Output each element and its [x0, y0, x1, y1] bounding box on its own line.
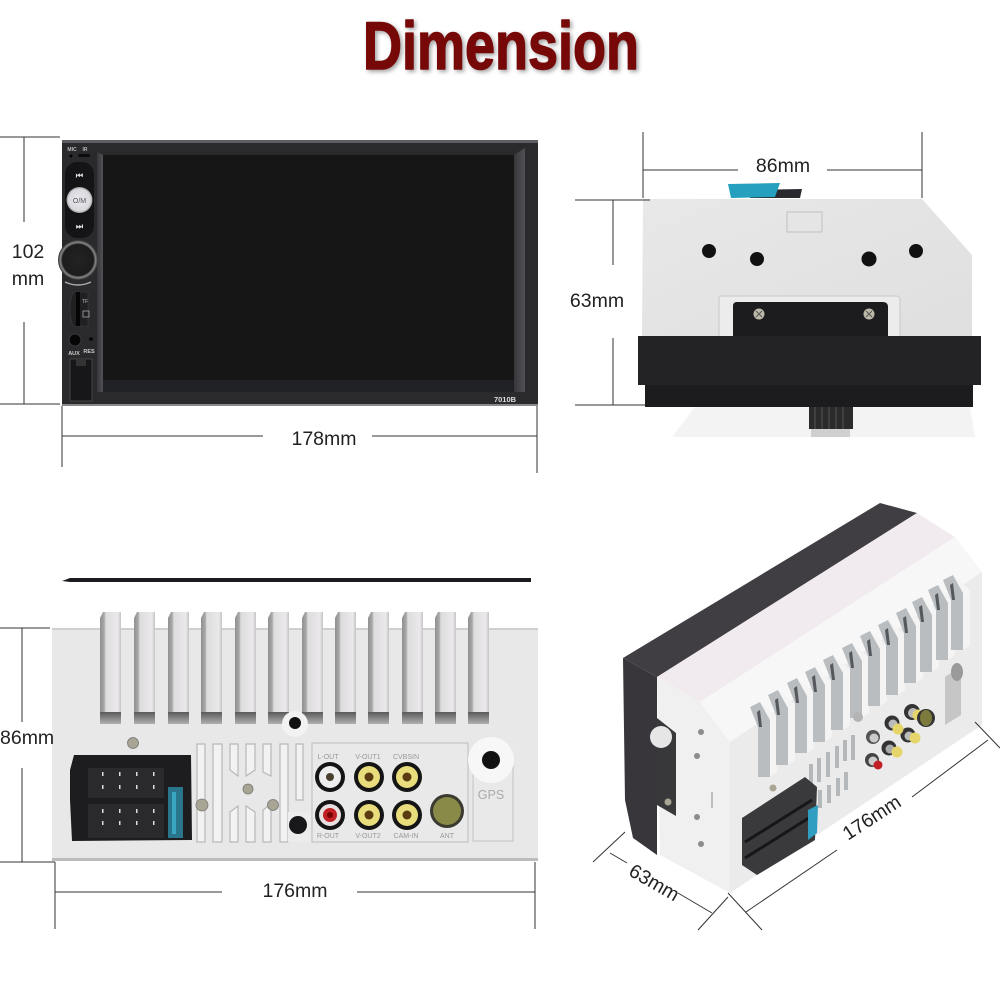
angled vent slots — [811, 735, 853, 808]
dimension: 63mm angled: 63mm — [625, 860, 683, 906]
CVBSIN jack — [392, 762, 422, 792]
top edge of faceplate — [62, 578, 531, 582]
side bracket — [650, 718, 676, 816]
control column: MIC — [67, 147, 77, 153]
mounting screw — [853, 712, 863, 722]
title: Dimension — [363, 8, 639, 84]
RCA jack block: CVBSIN — [393, 754, 419, 761]
dimension: 102mm height: mm — [12, 268, 44, 290]
power button — [66, 187, 92, 213]
control column: AUX — [68, 351, 80, 357]
knob — [809, 407, 853, 437]
dimension: 63mm height: 63mm — [570, 290, 624, 312]
dimension: 86mm rear depth: 86mm — [0, 727, 54, 749]
L-OUT jack — [315, 762, 345, 792]
RCA jack block: R-OUT — [317, 833, 340, 840]
dimension: 176mm angled — [728, 722, 1000, 930]
control column: O/M — [73, 198, 86, 205]
panel: rear view of head unit — [52, 578, 538, 861]
dimension: 86mm rear depth — [0, 628, 55, 862]
screen side strips — [97, 148, 525, 392]
ANT jack — [430, 794, 464, 828]
GPS socket — [468, 737, 514, 841]
angled fins — [750, 575, 970, 777]
USB cover — [70, 359, 92, 401]
GPS recess — [945, 663, 963, 725]
screen — [103, 155, 514, 380]
panel: angled rear view of head unit — [623, 503, 982, 893]
V-OUT1 jack — [354, 762, 384, 792]
dimension: 178mm width — [62, 406, 537, 473]
dimension: 102mm height: 102 — [12, 241, 44, 263]
dimension: 86mm depth: 86mm — [756, 155, 810, 177]
panel: front view of head unit — [58, 140, 538, 406]
wiring connector — [70, 755, 192, 841]
RCA jack block: V-OUT2 — [355, 833, 381, 840]
heat sink fins — [100, 612, 489, 724]
control column: TF — [82, 299, 88, 305]
side surface — [657, 677, 730, 893]
dimension: 102mm height — [0, 137, 60, 404]
rear surface — [730, 572, 982, 893]
angled connector — [742, 777, 818, 875]
metal top plate — [642, 199, 972, 337]
dimension: 63mm height — [570, 200, 650, 405]
volume knob — [58, 240, 98, 280]
mounting hole — [282, 711, 308, 737]
RCA jack block: L-OUT — [318, 754, 339, 761]
vent slots — [197, 744, 303, 842]
screws — [128, 738, 393, 811]
GPS socket: GPS — [478, 788, 504, 802]
control column: ⏭ — [76, 222, 84, 231]
dimension: 63mm angled — [593, 832, 728, 930]
side screw holes — [694, 729, 712, 847]
SD slot — [70, 292, 88, 326]
RCA jack block: ANT — [440, 833, 455, 840]
vent holes — [702, 244, 923, 266]
black front edge — [623, 503, 917, 677]
dimension: 176mm rear width — [55, 862, 535, 929]
angled RCA jacks — [865, 704, 935, 770]
blue fuse — [168, 787, 183, 838]
rear plate — [52, 629, 538, 860]
dimension: 178mm width: 178mm — [291, 428, 357, 450]
control column: IR — [82, 147, 88, 153]
fuse tab — [728, 183, 802, 198]
black plug — [288, 812, 310, 842]
dimension: 176mm angled: 176mm — [839, 791, 905, 845]
RCA jack block: CAM-IN — [394, 833, 418, 840]
control column — [58, 147, 98, 401]
V-OUT2 jack — [354, 800, 384, 830]
control column: ⏮ — [76, 171, 83, 180]
dimension: 86mm depth — [643, 132, 922, 198]
dimension: 176mm rear width: 176mm — [262, 880, 328, 902]
RCA jack block — [312, 743, 468, 842]
black front band — [638, 336, 981, 385]
R-OUT jack — [315, 800, 345, 830]
top surface — [657, 513, 955, 702]
AUX jack — [69, 334, 81, 346]
title: Dimension — [365, 10, 641, 86]
control column: RES — [83, 349, 95, 355]
model number: 7010B — [494, 395, 517, 404]
floor shadow — [672, 407, 975, 437]
bracket — [719, 296, 900, 337]
RCA jack block: V-OUT1 — [355, 754, 381, 761]
CAM-IN jack — [392, 800, 422, 830]
panel: side view of head unit — [638, 183, 981, 437]
